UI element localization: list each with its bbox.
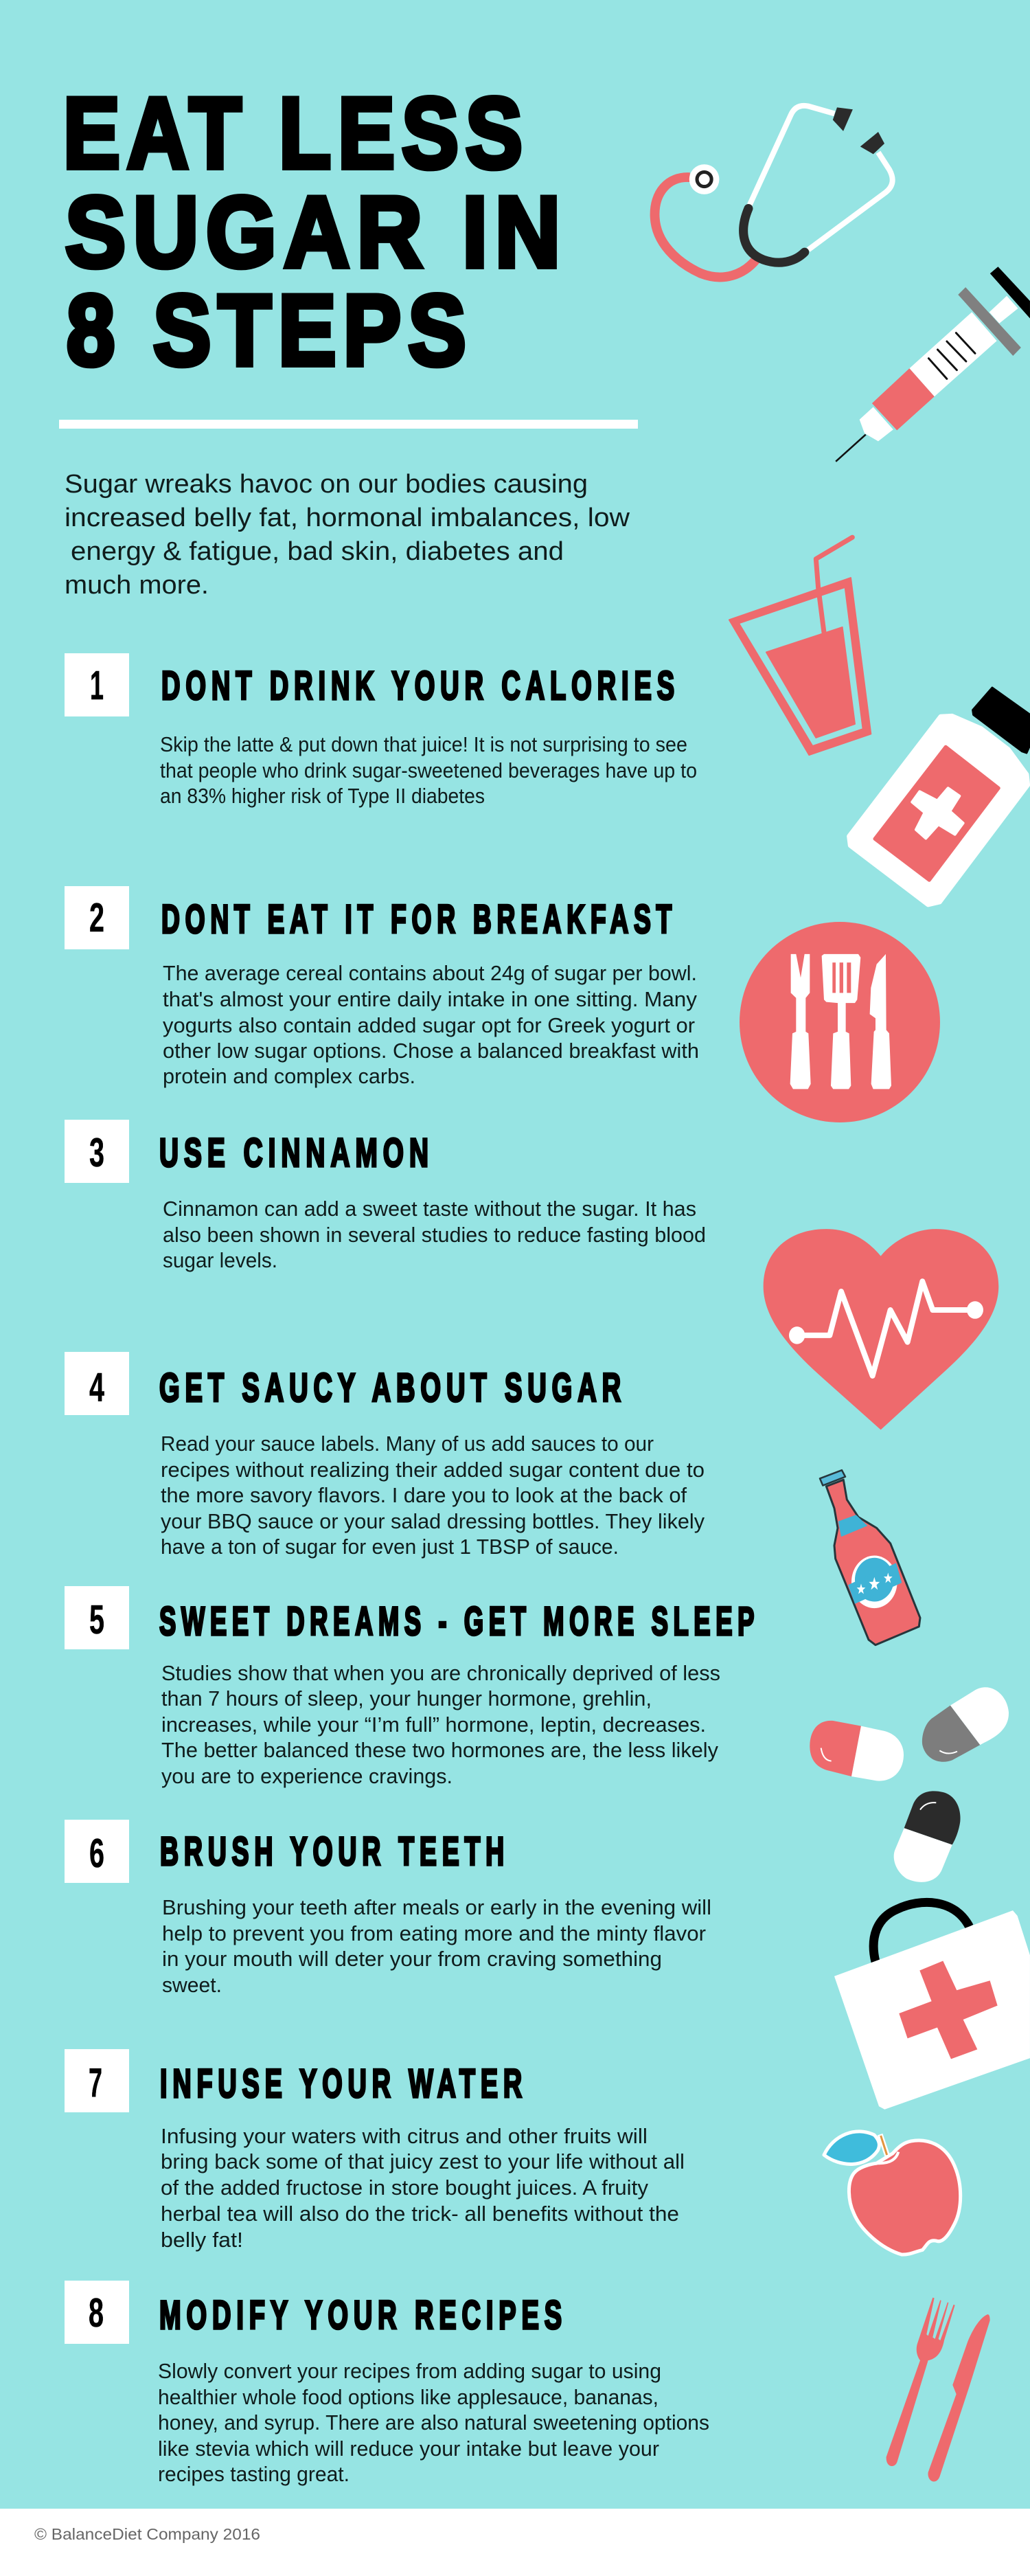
number badge 7 <box>65 2049 129 2112</box>
icon: sauce bottle <box>820 1470 920 1645</box>
body 8: recipes tasting great. <box>158 2462 350 2486</box>
body 3: Cinnamon can add a sweet taste without the sugar. It has <box>163 1197 696 1221</box>
body 8: healthier whole food options like applesauce, bananas, <box>158 2385 659 2409</box>
body 7: of the added fructose in store bought juices. A fruity <box>161 2176 648 2200</box>
intro text: much more. <box>65 571 209 600</box>
body 7 <box>161 2124 685 2252</box>
title: 8 STEPS <box>67 274 473 386</box>
body 4: Read your sauce labels. Many of us add sauces to our <box>161 1432 654 1456</box>
body 6: Brushing your teeth after meals or early in the evening will <box>162 1895 711 1919</box>
number badge 3 <box>65 1120 129 1183</box>
body 6: in your mouth will deter your from craving something <box>162 1947 662 1971</box>
body 4 <box>161 1432 705 1559</box>
step 8 <box>65 2281 709 2486</box>
icon: syringe <box>836 267 1030 462</box>
intro text: energy & fatigue, bad skin, diabetes and <box>71 537 564 566</box>
body 8 <box>158 2359 709 2486</box>
body 7: belly fat! <box>161 2228 243 2252</box>
body 6: sweet. <box>162 1973 222 1997</box>
body 2: that's almost your entire daily intake in one sitting. Many <box>163 987 697 1011</box>
step 3 <box>65 1120 706 1272</box>
number badge 2 <box>65 886 129 949</box>
body 5: than 7 hours of sleep, your hunger hormone, grehlin, <box>161 1686 652 1710</box>
title: EAT LESS <box>63 77 529 189</box>
number badge 2: 2 <box>89 895 104 940</box>
number badge 5 <box>65 1586 129 1649</box>
step 5 <box>65 1586 759 1788</box>
intro text: increased belly fat, hormonal imbalances, low <box>65 504 630 532</box>
body 3 <box>163 1197 706 1272</box>
body 7: bring back some of that juicy zest to your life without all <box>161 2149 685 2173</box>
title: SUGAR IN <box>65 176 568 288</box>
body 8: like stevia which will reduce your intake but leave your <box>158 2437 659 2461</box>
title <box>63 77 568 386</box>
body 8: Slowly convert your recipes from adding sugar to using <box>158 2359 661 2383</box>
number badge 8: 8 <box>89 2290 104 2336</box>
icon: glass with straw <box>729 537 871 755</box>
body 3: also been shown in several studies to reduce fasting blood <box>163 1223 706 1247</box>
body 6: help to prevent you from eating more and the minty flavor <box>162 1921 706 1945</box>
number badge 3: 3 <box>89 1130 104 1175</box>
body 6 <box>162 1895 711 1997</box>
icon: heart with pulse <box>764 1229 998 1430</box>
body 8: honey, and syrup. There are also natural sweetening options <box>158 2410 709 2434</box>
step 4 <box>65 1352 705 1559</box>
number badge 7: 7 <box>89 2060 102 2105</box>
body 5: Studies show that when you are chronically deprived of less <box>161 1661 720 1685</box>
number badge 6: 6 <box>89 1831 104 1876</box>
heading 4: GET SAUCY ABOUT SUGAR <box>159 1366 626 1410</box>
body 5: increases, while your “I’m full” hormone, leptin, decreases. <box>161 1713 706 1737</box>
body 3: sugar levels. <box>163 1248 277 1272</box>
heading 2: DONT EAT IT FOR BREAKFAST <box>161 897 677 942</box>
heading 8: MODIFY YOUR RECIPES <box>159 2293 567 2338</box>
number badge 1: 1 <box>90 663 104 708</box>
body 5 <box>161 1661 720 1788</box>
body 2 <box>163 961 699 1088</box>
intro text: Sugar wreaks havoc on our bodies causing <box>65 470 588 499</box>
body 1: that people who drink sugar-sweetened beverages have up to <box>160 758 697 782</box>
heading 3: USE CINNAMON <box>159 1131 434 1175</box>
icon: coral capsule <box>810 1721 904 1781</box>
body 4: recipes without realizing their added sugar content due to <box>161 1458 705 1482</box>
body 1: an 83% higher risk of Type II diabetes <box>160 784 485 808</box>
body 2: protein and complex carbs. <box>163 1064 415 1088</box>
icon: grey capsule <box>922 1687 1009 1762</box>
body 2: other low sugar options. Chose a balanced breakfast with <box>163 1039 699 1063</box>
body 1 <box>160 732 697 808</box>
footer <box>0 2509 1030 2576</box>
body 7: Infusing your waters with citrus and other fruits will <box>161 2124 648 2148</box>
body 7: herbal tea will also do the trick- all benefits without the <box>161 2202 679 2226</box>
heading 6: BRUSH YOUR TEETH <box>160 1829 510 1874</box>
number badge 1 <box>65 653 129 716</box>
number badge 6 <box>65 1820 129 1883</box>
body 4: your BBQ sauce or your salad dressing bottles. They likely <box>161 1509 705 1533</box>
body 4: the more savory flavors. I dare you to look at the back of <box>161 1483 687 1507</box>
footer: © BalanceDiet Company 2016 <box>34 2525 260 2543</box>
intro text <box>65 470 630 600</box>
step 1 <box>65 653 697 808</box>
body 2: The average cereal contains about 24g of sugar per bowl. <box>163 961 697 985</box>
number badge 8 <box>65 2281 129 2344</box>
icon: stethoscope <box>655 106 893 277</box>
icon: apple <box>824 2132 961 2255</box>
icon: fork and knife <box>886 2298 990 2481</box>
step 2 <box>65 886 699 1088</box>
number badge 4: 4 <box>89 1365 104 1410</box>
icon: black capsule <box>894 1791 961 1882</box>
body 2: yogurts also contain added sugar opt for Greek yogurt or <box>163 1013 695 1037</box>
body 4: have a ton of sugar for even just 1 TBSP of sauce. <box>161 1535 619 1559</box>
heading 1: DONT DRINK YOUR CALORIES <box>161 664 680 708</box>
icon: medicine bottle <box>849 688 1030 905</box>
body 5: The better balanced these two hormones are, the less likely <box>161 1738 718 1762</box>
icon: utensils in circle <box>740 922 940 1122</box>
number badge 5: 5 <box>89 1597 104 1642</box>
body 1: Skip the latte & put down that juice! It is not surprising to see <box>160 732 687 756</box>
number badge 4 <box>65 1352 129 1415</box>
step 6 <box>65 1820 711 1997</box>
icon: first aid kit <box>834 1902 1030 2110</box>
heading 7: INFUSE YOUR WATER <box>160 2061 527 2106</box>
step 7 <box>65 2049 685 2252</box>
body 5: you are to experience cravings. <box>161 1764 453 1788</box>
